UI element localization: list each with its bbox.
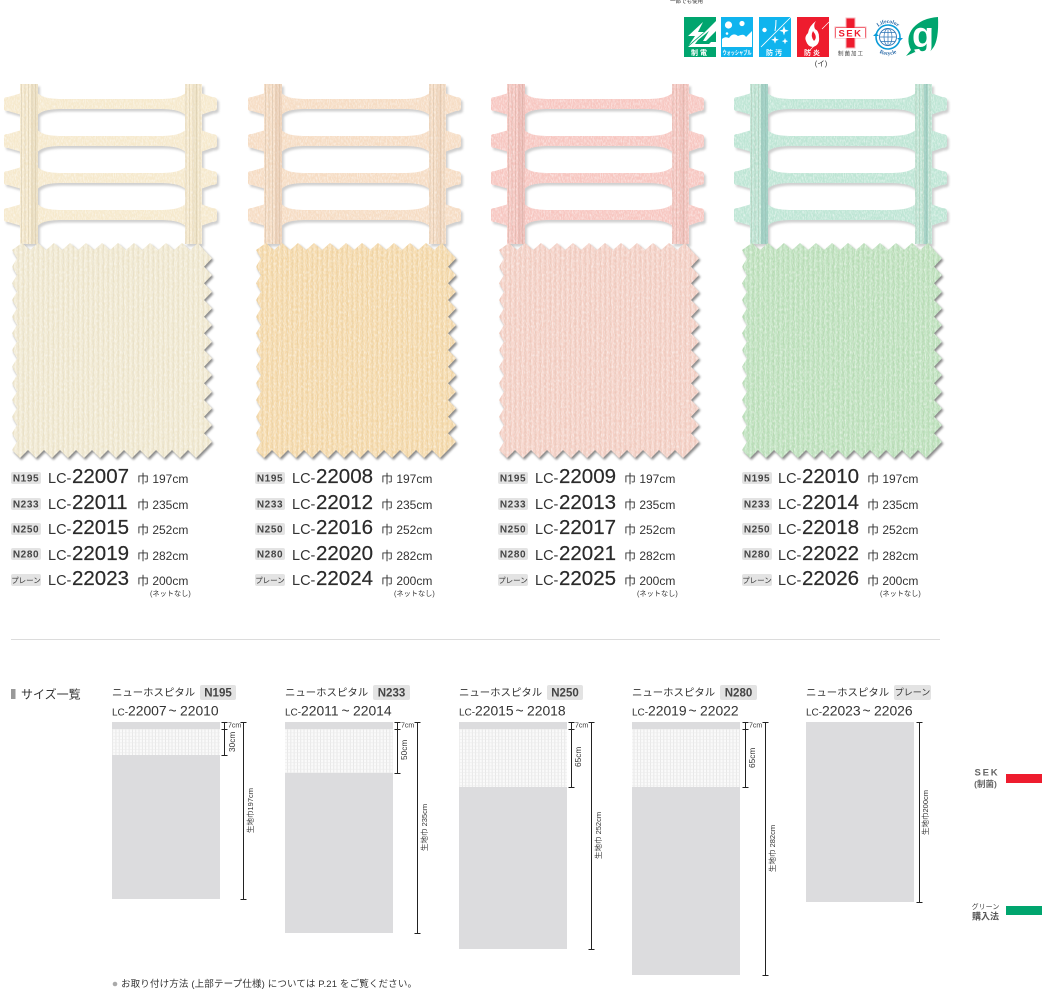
size diagram N233: 22011 bbox=[301, 702, 339, 718]
flame class note: (イ) bbox=[815, 59, 828, 68]
product list ivory: 22007 bbox=[72, 465, 129, 488]
product list apricot: N195 bbox=[257, 474, 283, 484]
net sample apricot bbox=[248, 84, 463, 246]
fabric swatch ivory bbox=[12, 243, 214, 460]
size diagram plain: LC- bbox=[806, 708, 822, 718]
product list pink: LC- bbox=[535, 522, 559, 538]
product list apricot: N250 bbox=[257, 524, 283, 536]
size diagram N195: N195 bbox=[204, 688, 232, 700]
product list pink: 巾 282cm bbox=[624, 549, 675, 563]
size diagram N233: 22014 bbox=[353, 702, 392, 718]
size diagram N250: 7cm bbox=[575, 722, 588, 730]
icon: SEK mark: 制菌加工 bbox=[838, 50, 864, 58]
certification icons bbox=[684, 14, 938, 68]
size diagram N250: 65cm bbox=[573, 747, 583, 767]
size diagram N280: 65cm bbox=[747, 748, 757, 768]
size diagram N233: ~ bbox=[342, 702, 350, 718]
column 4: green bbox=[734, 84, 949, 598]
size diagram N280: ニューホスピタル bbox=[632, 687, 715, 699]
product list ivory: LC- bbox=[48, 471, 72, 487]
icon: SEK mark bbox=[835, 18, 866, 58]
product list ivory: N280 bbox=[13, 550, 39, 560]
product list green: 巾 197cm bbox=[867, 472, 918, 486]
product list apricot bbox=[255, 465, 435, 598]
product list pink: 巾 197cm bbox=[624, 472, 675, 486]
product list ivory: N250 bbox=[13, 524, 39, 536]
product list pink: 巾 200cm bbox=[624, 574, 675, 588]
icon: washable bbox=[721, 17, 753, 57]
product list apricot: 22012 bbox=[316, 491, 373, 514]
product list ivory: LC- bbox=[48, 573, 72, 589]
size diagram N250: ニューホスピタル bbox=[459, 687, 542, 699]
product list apricot: LC- bbox=[292, 573, 316, 589]
icon: antistatic: 制電 bbox=[691, 48, 709, 57]
size diagram N233: N233 bbox=[378, 688, 405, 700]
product list pink: (ネットなし) bbox=[637, 589, 678, 598]
size diagram N280: LC- bbox=[632, 708, 648, 718]
size diagram N195: 22010 bbox=[180, 702, 219, 718]
icon: green leaf g bbox=[906, 14, 938, 56]
heading: size list: サイズ一覧 bbox=[21, 686, 81, 702]
product list ivory: LC- bbox=[48, 548, 72, 564]
size diagram N233: ニューホスピタル bbox=[285, 687, 368, 699]
product list pink: LC- bbox=[535, 497, 559, 513]
size diagram N250: 22015 bbox=[475, 702, 514, 718]
size diagram N195: 7cm bbox=[228, 722, 241, 730]
product list green: (ネットなし) bbox=[880, 589, 921, 598]
product list apricot: 巾 282cm bbox=[381, 549, 432, 563]
product list green: N233 bbox=[744, 500, 770, 510]
product list green: 巾 252cm bbox=[867, 523, 918, 537]
size diagram N195: ニューホスピタル bbox=[112, 687, 195, 699]
size diagram N280: N280 bbox=[725, 688, 752, 700]
size diagram N195: LC- bbox=[112, 708, 128, 718]
fabric swatch pink bbox=[499, 243, 700, 460]
size diagram N250: LC- bbox=[459, 708, 475, 718]
net sample green bbox=[734, 84, 949, 246]
icon: stain resistant: 防汚 bbox=[766, 48, 784, 57]
product list green: LC- bbox=[778, 548, 802, 564]
icon: flame resistant: 防炎 bbox=[804, 48, 822, 57]
product list green bbox=[742, 465, 921, 598]
column 1: ivory bbox=[4, 84, 219, 598]
product list pink: N280 bbox=[500, 550, 526, 560]
icon: recycle globe: Recycle bbox=[879, 50, 896, 56]
product list green: LC- bbox=[778, 522, 802, 538]
fabric swatch green bbox=[742, 243, 944, 460]
side marker: SEK bbox=[974, 768, 1042, 789]
product list pink: N250 bbox=[500, 524, 526, 536]
size diagram plain: 22026 bbox=[874, 702, 913, 718]
product list pink: N195 bbox=[500, 474, 526, 484]
product list green: LC- bbox=[778, 573, 802, 589]
product list green: プレーン bbox=[742, 576, 772, 585]
size diagram N280: 22019 bbox=[648, 702, 687, 718]
size diagram N195: 生地巾197cm bbox=[245, 788, 255, 833]
product list pink: 巾 235cm bbox=[624, 498, 675, 512]
product list apricot: プレーン bbox=[255, 576, 285, 585]
icon: recycle globe: Lifecolor bbox=[876, 20, 900, 27]
size diagram N250: 22018 bbox=[527, 702, 566, 718]
size diagram plain: 22023 bbox=[822, 702, 861, 718]
icon: stain resistant bbox=[759, 17, 791, 57]
fabric swatch apricot bbox=[256, 243, 458, 460]
side marker: green purchasing: 購入法 bbox=[972, 910, 999, 922]
product list green: 22026 bbox=[802, 567, 859, 590]
product list green: N195 bbox=[744, 474, 770, 484]
product list ivory: LC- bbox=[48, 497, 72, 513]
product list pink: 22025 bbox=[559, 567, 616, 590]
product list green: LC- bbox=[778, 497, 802, 513]
product list green: 巾 282cm bbox=[867, 549, 918, 563]
product list apricot: N233 bbox=[257, 500, 283, 510]
size diagram plain: ~ bbox=[862, 702, 871, 718]
product list ivory bbox=[11, 465, 191, 598]
product list ivory: 22015 bbox=[72, 516, 129, 539]
size diagram N195: 22007 bbox=[128, 702, 167, 718]
product list ivory: 巾 200cm bbox=[137, 574, 188, 588]
product list apricot: 巾 200cm bbox=[381, 574, 432, 588]
size diagram N250: N250 bbox=[551, 688, 579, 700]
size diagram plain: プレーン bbox=[895, 688, 930, 698]
footnote: お取り付け方法 (上部テープ仕様) については P.21 をご覧ください。 bbox=[121, 978, 417, 990]
side marker: green purchasing bbox=[972, 902, 1042, 922]
product list ivory: N233 bbox=[13, 500, 39, 510]
size diagram N195 bbox=[112, 685, 255, 900]
product list green: N280 bbox=[744, 550, 770, 560]
side marker: green purchasing: グリーン bbox=[972, 902, 999, 911]
product list ivory: 22011 bbox=[72, 491, 127, 514]
product list pink: 22017 bbox=[559, 516, 616, 539]
product list pink: 22009 bbox=[559, 465, 616, 488]
icon: green leaf g: g bbox=[912, 14, 934, 55]
side marker: SEK: SEK bbox=[974, 768, 999, 778]
net sample pink bbox=[491, 84, 706, 246]
product list apricot: N280 bbox=[257, 550, 283, 560]
size diagram N195: ~ bbox=[168, 702, 177, 718]
product list pink: N233 bbox=[500, 500, 526, 510]
icon: flame resistant bbox=[797, 17, 829, 57]
icon: antistatic bbox=[684, 17, 716, 57]
product list ivory: 22023 bbox=[72, 567, 129, 590]
size diagram N280: 22022 bbox=[700, 702, 739, 718]
size diagram N233: 50cm bbox=[399, 740, 409, 760]
product list ivory: 巾 282cm bbox=[137, 549, 188, 563]
product list apricot: 22008 bbox=[316, 465, 373, 488]
product list apricot: LC- bbox=[292, 522, 316, 538]
product list ivory: LC- bbox=[48, 522, 72, 538]
column 2: apricot bbox=[248, 84, 463, 598]
product list green: LC- bbox=[778, 471, 802, 487]
product list pink: LC- bbox=[535, 573, 559, 589]
product list apricot: 22024 bbox=[316, 567, 373, 590]
product list pink: プレーン bbox=[498, 576, 528, 585]
product list pink: LC- bbox=[535, 548, 559, 564]
product list apricot: 巾 197cm bbox=[381, 472, 432, 486]
size diagram plain: 生地巾200cm bbox=[920, 790, 930, 835]
product list pink: 巾 252cm bbox=[624, 523, 675, 537]
product list green: 22010 bbox=[802, 465, 859, 488]
product list green: 22014 bbox=[802, 491, 859, 514]
size diagram N195: 30cm bbox=[227, 732, 237, 752]
column 3: pink bbox=[491, 84, 706, 598]
product list apricot: 巾 252cm bbox=[381, 523, 432, 537]
size diagram plain bbox=[806, 685, 931, 902]
product list pink: 22021 bbox=[559, 542, 616, 565]
product list apricot: 22016 bbox=[316, 516, 373, 539]
product list ivory: 巾 197cm bbox=[137, 472, 188, 486]
size diagram N280 bbox=[632, 685, 777, 976]
product list apricot: 巾 235cm bbox=[381, 498, 432, 512]
size diagram N233: 7cm bbox=[401, 722, 414, 730]
product list ivory: 巾 235cm bbox=[137, 498, 188, 512]
size diagram N250: 生地巾 252cm bbox=[593, 812, 603, 859]
product list green: N250 bbox=[744, 524, 770, 536]
product list ivory: N195 bbox=[13, 474, 39, 484]
size diagram N233 bbox=[285, 685, 429, 934]
product list pink bbox=[498, 465, 678, 598]
side marker: SEK: (制菌) bbox=[974, 779, 997, 789]
size diagram N233: 生地巾 235cm bbox=[419, 804, 429, 851]
size diagram N250 bbox=[459, 685, 603, 950]
icon: washable: ウォッシャブル bbox=[722, 49, 752, 57]
product list green: 22022 bbox=[802, 542, 859, 565]
size diagram plain: ニューホスピタル bbox=[806, 687, 889, 699]
product list apricot: (ネットなし) bbox=[394, 589, 435, 598]
product list apricot: LC- bbox=[292, 548, 316, 564]
size diagram N280: ~ bbox=[688, 702, 697, 718]
product list ivory: (ネットなし) bbox=[150, 589, 191, 598]
size diagram N280: 生地巾 282cm bbox=[767, 825, 777, 872]
product list ivory: 22019 bbox=[72, 542, 129, 565]
product list green: 巾 200cm bbox=[867, 574, 918, 588]
product list apricot: 22020 bbox=[316, 542, 373, 565]
product list green: 巾 235cm bbox=[867, 498, 918, 512]
product list apricot: LC- bbox=[292, 471, 316, 487]
product list green: 22018 bbox=[802, 516, 859, 539]
icon: SEK mark: SEK bbox=[838, 29, 863, 40]
product list ivory: 巾 252cm bbox=[137, 523, 188, 537]
product list ivory: プレーン bbox=[11, 576, 41, 585]
net sample ivory bbox=[4, 84, 219, 246]
size diagram N233: LC- bbox=[285, 708, 301, 718]
icon: recycle globe bbox=[873, 20, 903, 56]
product list pink: LC- bbox=[535, 471, 559, 487]
product list apricot: LC- bbox=[292, 497, 316, 513]
size diagram N280: 7cm bbox=[749, 722, 762, 730]
size diagram N250: ~ bbox=[516, 702, 524, 718]
product list pink: 22013 bbox=[559, 491, 616, 514]
